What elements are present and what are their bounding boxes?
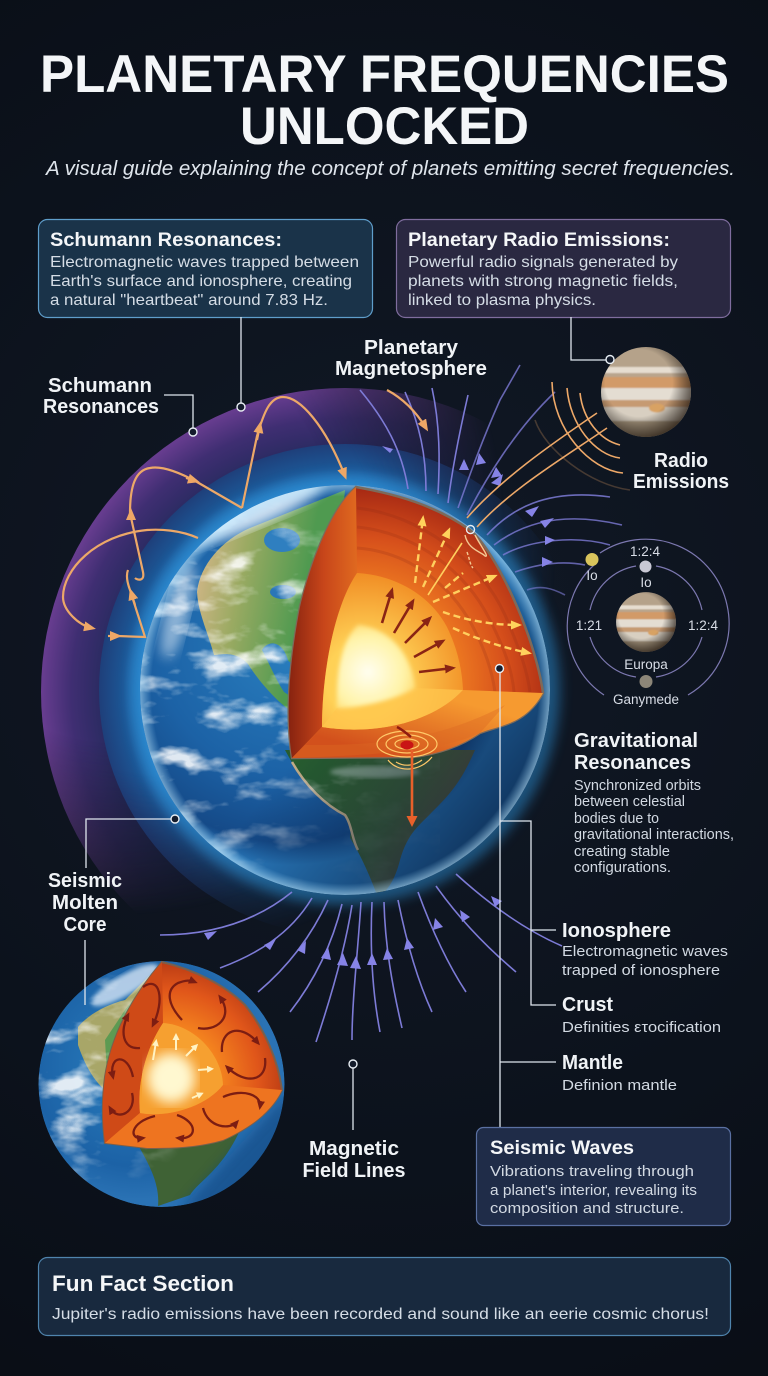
panel: Seismic Waves: a planet's interior, revealing its xyxy=(490,1183,697,1199)
panel: Fun Fact Section xyxy=(38,1258,730,1336)
molten outer core xyxy=(139,1023,223,1114)
orbital resonance diagram: Europa xyxy=(624,657,668,672)
mantle strata xyxy=(357,508,530,692)
yellow dashed wave arrows xyxy=(415,518,529,653)
text block: Crust: Crust xyxy=(562,994,613,1016)
orbital resonance diagram xyxy=(567,539,729,707)
panel: Schumann Resonances definition: Electromagnetic waves trapped between xyxy=(50,254,359,271)
orbital resonance diagram: Ganymede xyxy=(613,692,679,707)
panel: Schumann Resonances definition xyxy=(38,220,372,318)
planet Earth cutaway (main) xyxy=(140,463,550,900)
text block: Ionosphere: Ionosphere xyxy=(562,920,671,942)
label: Planetary Magnetosphere: Planetary xyxy=(364,337,459,359)
seismic waves at focus xyxy=(377,727,437,824)
label: Planetary Magnetosphere: Magnetosphere xyxy=(335,358,487,380)
text block: Mantle: Definion mantle xyxy=(562,1078,677,1094)
text block: Gravitational Resonances: Synchronized orbits xyxy=(574,778,701,794)
label: Seismic Molten Core: Seismic xyxy=(48,870,122,892)
connector: Magnetic Field Lines xyxy=(349,1060,357,1130)
outer core xyxy=(322,573,463,730)
panel: Planetary Radio Emissions definition: Planetary Radio Emissions: xyxy=(408,230,670,251)
orbital resonance diagram: Io xyxy=(586,568,598,583)
subtitle: A visual guide explaining the concept of planets emitting secret frequencies. xyxy=(44,157,735,180)
clouds xyxy=(140,512,388,870)
planet Earth cutaway (molten core) xyxy=(38,957,290,1210)
core arrows xyxy=(153,1036,211,1098)
ionosphere blue shell xyxy=(99,444,591,936)
convection arrows xyxy=(110,981,265,1138)
panel: Planetary Radio Emissions definition: Powerful radio signals generated by xyxy=(408,254,678,271)
connector: Schumann label to shell xyxy=(164,395,197,436)
cutaway wedge xyxy=(289,487,543,758)
orbital resonance diagram: 1:21 xyxy=(576,618,602,633)
text block: Gravitational Resonances: Gravitational xyxy=(574,730,698,752)
panel: Schumann Resonances definition: Schumann Resonances: xyxy=(50,230,282,251)
text block: Mantle xyxy=(562,1052,677,1094)
molten inner core xyxy=(147,1053,195,1103)
text block: Ionosphere: trapped of ionosphere xyxy=(562,963,720,979)
label: Seismic Molten Core: Molten xyxy=(52,892,118,914)
label: Magnetic Field Lines: Magnetic xyxy=(309,1138,399,1160)
title: UNLOCKED xyxy=(240,97,529,156)
radio emission waves xyxy=(467,382,630,527)
inner core xyxy=(337,625,415,708)
epicenter squiggle xyxy=(465,526,486,568)
label: Schumann Resonances: Resonances xyxy=(43,396,159,418)
text block: Ionosphere xyxy=(562,920,728,979)
dark red convection arrows xyxy=(382,590,453,672)
title: PLANETARY FREQUENCIES xyxy=(40,45,729,104)
text block: Crust xyxy=(562,994,721,1036)
text block: Gravitational Resonances: creating stable xyxy=(574,844,670,860)
North America xyxy=(197,490,345,712)
panel: Seismic Waves: Vibrations traveling through xyxy=(490,1164,694,1180)
orbital resonance diagram: 1:2:4 xyxy=(688,618,719,633)
panel: Schumann Resonances definition: a natural "heartbeat" around 7.83 Hz. xyxy=(50,292,328,309)
connector: Radio box to Jupiter xyxy=(571,317,614,364)
magnetosphere outer purple shell xyxy=(41,388,480,902)
label: Schumann Resonances xyxy=(43,375,159,418)
title xyxy=(40,45,729,156)
panel: Seismic Waves xyxy=(476,1128,730,1226)
label: Radio Emissions: Emissions xyxy=(633,471,729,493)
Jupiter (radio source) xyxy=(596,342,696,442)
text block: Mantle: Mantle xyxy=(562,1052,623,1074)
text block: Gravitational Resonances: Resonances xyxy=(574,752,691,774)
text block: Gravitational Resonances: gravitational interactions, xyxy=(574,827,734,843)
orbital resonance diagram: 1:2:4 xyxy=(630,544,661,559)
orbital resonance diagram: Io xyxy=(640,575,652,590)
text block: Gravitational Resonances: configurations. xyxy=(574,860,671,876)
label: Schumann Resonances: Schumann xyxy=(48,375,152,397)
moons xyxy=(586,553,598,566)
text block: Gravitational Resonances: bodies due to xyxy=(574,811,659,827)
panel: Planetary Radio Emissions definition: linked to plasma physics. xyxy=(408,292,596,309)
text block: Ionosphere: Electromagnetic waves xyxy=(562,944,728,960)
panel: Fun Fact Section: Jupiter's radio emissions have been recorded and sound like an eerie cosmic chorus! xyxy=(52,1306,709,1323)
panel: Seismic Waves: Seismic Waves xyxy=(490,1138,634,1159)
text block: Crust: Definities ετocification xyxy=(562,1020,721,1036)
label: Planetary Magnetosphere xyxy=(335,337,487,380)
label: Magnetic Field Lines: Field Lines xyxy=(302,1160,406,1182)
South America xyxy=(285,750,475,898)
panel: Seismic Waves: composition and structure. xyxy=(490,1201,684,1217)
label: Radio Emissions xyxy=(633,450,729,493)
magnetosphere callout arrow xyxy=(387,390,426,428)
Schumann resonance wave paths xyxy=(63,397,345,637)
panel: Planetary Radio Emissions definition: planets with strong magnetic fields, xyxy=(408,273,678,290)
text block: Gravitational Resonances: between celestial xyxy=(574,794,685,810)
label: Radio Emissions: Radio xyxy=(654,450,708,472)
magnetic field lines: bottom xyxy=(160,874,562,1042)
connector: Seismic Molten Core xyxy=(85,815,179,1005)
label: Seismic Molten Core: Core xyxy=(64,914,106,936)
bottom face xyxy=(292,690,543,758)
left face xyxy=(289,487,357,758)
text block: Gravitational Resonances xyxy=(574,730,734,876)
connector: Schumann box to shell xyxy=(237,317,245,411)
panel: Planetary Radio Emissions definition xyxy=(396,220,730,318)
magnetic field lines: upper right xyxy=(360,365,622,595)
earth globe xyxy=(140,463,550,900)
label: Magnetic Field Lines xyxy=(302,1138,406,1182)
connector: layers to labels xyxy=(496,664,556,1127)
small Jupiter xyxy=(613,589,679,655)
label: Seismic Molten Core xyxy=(48,870,122,936)
panel: Schumann Resonances definition: Earth's surface and ionosphere, creating xyxy=(50,273,352,290)
panel: Fun Fact Section: Fun Fact Section xyxy=(52,1271,234,1296)
